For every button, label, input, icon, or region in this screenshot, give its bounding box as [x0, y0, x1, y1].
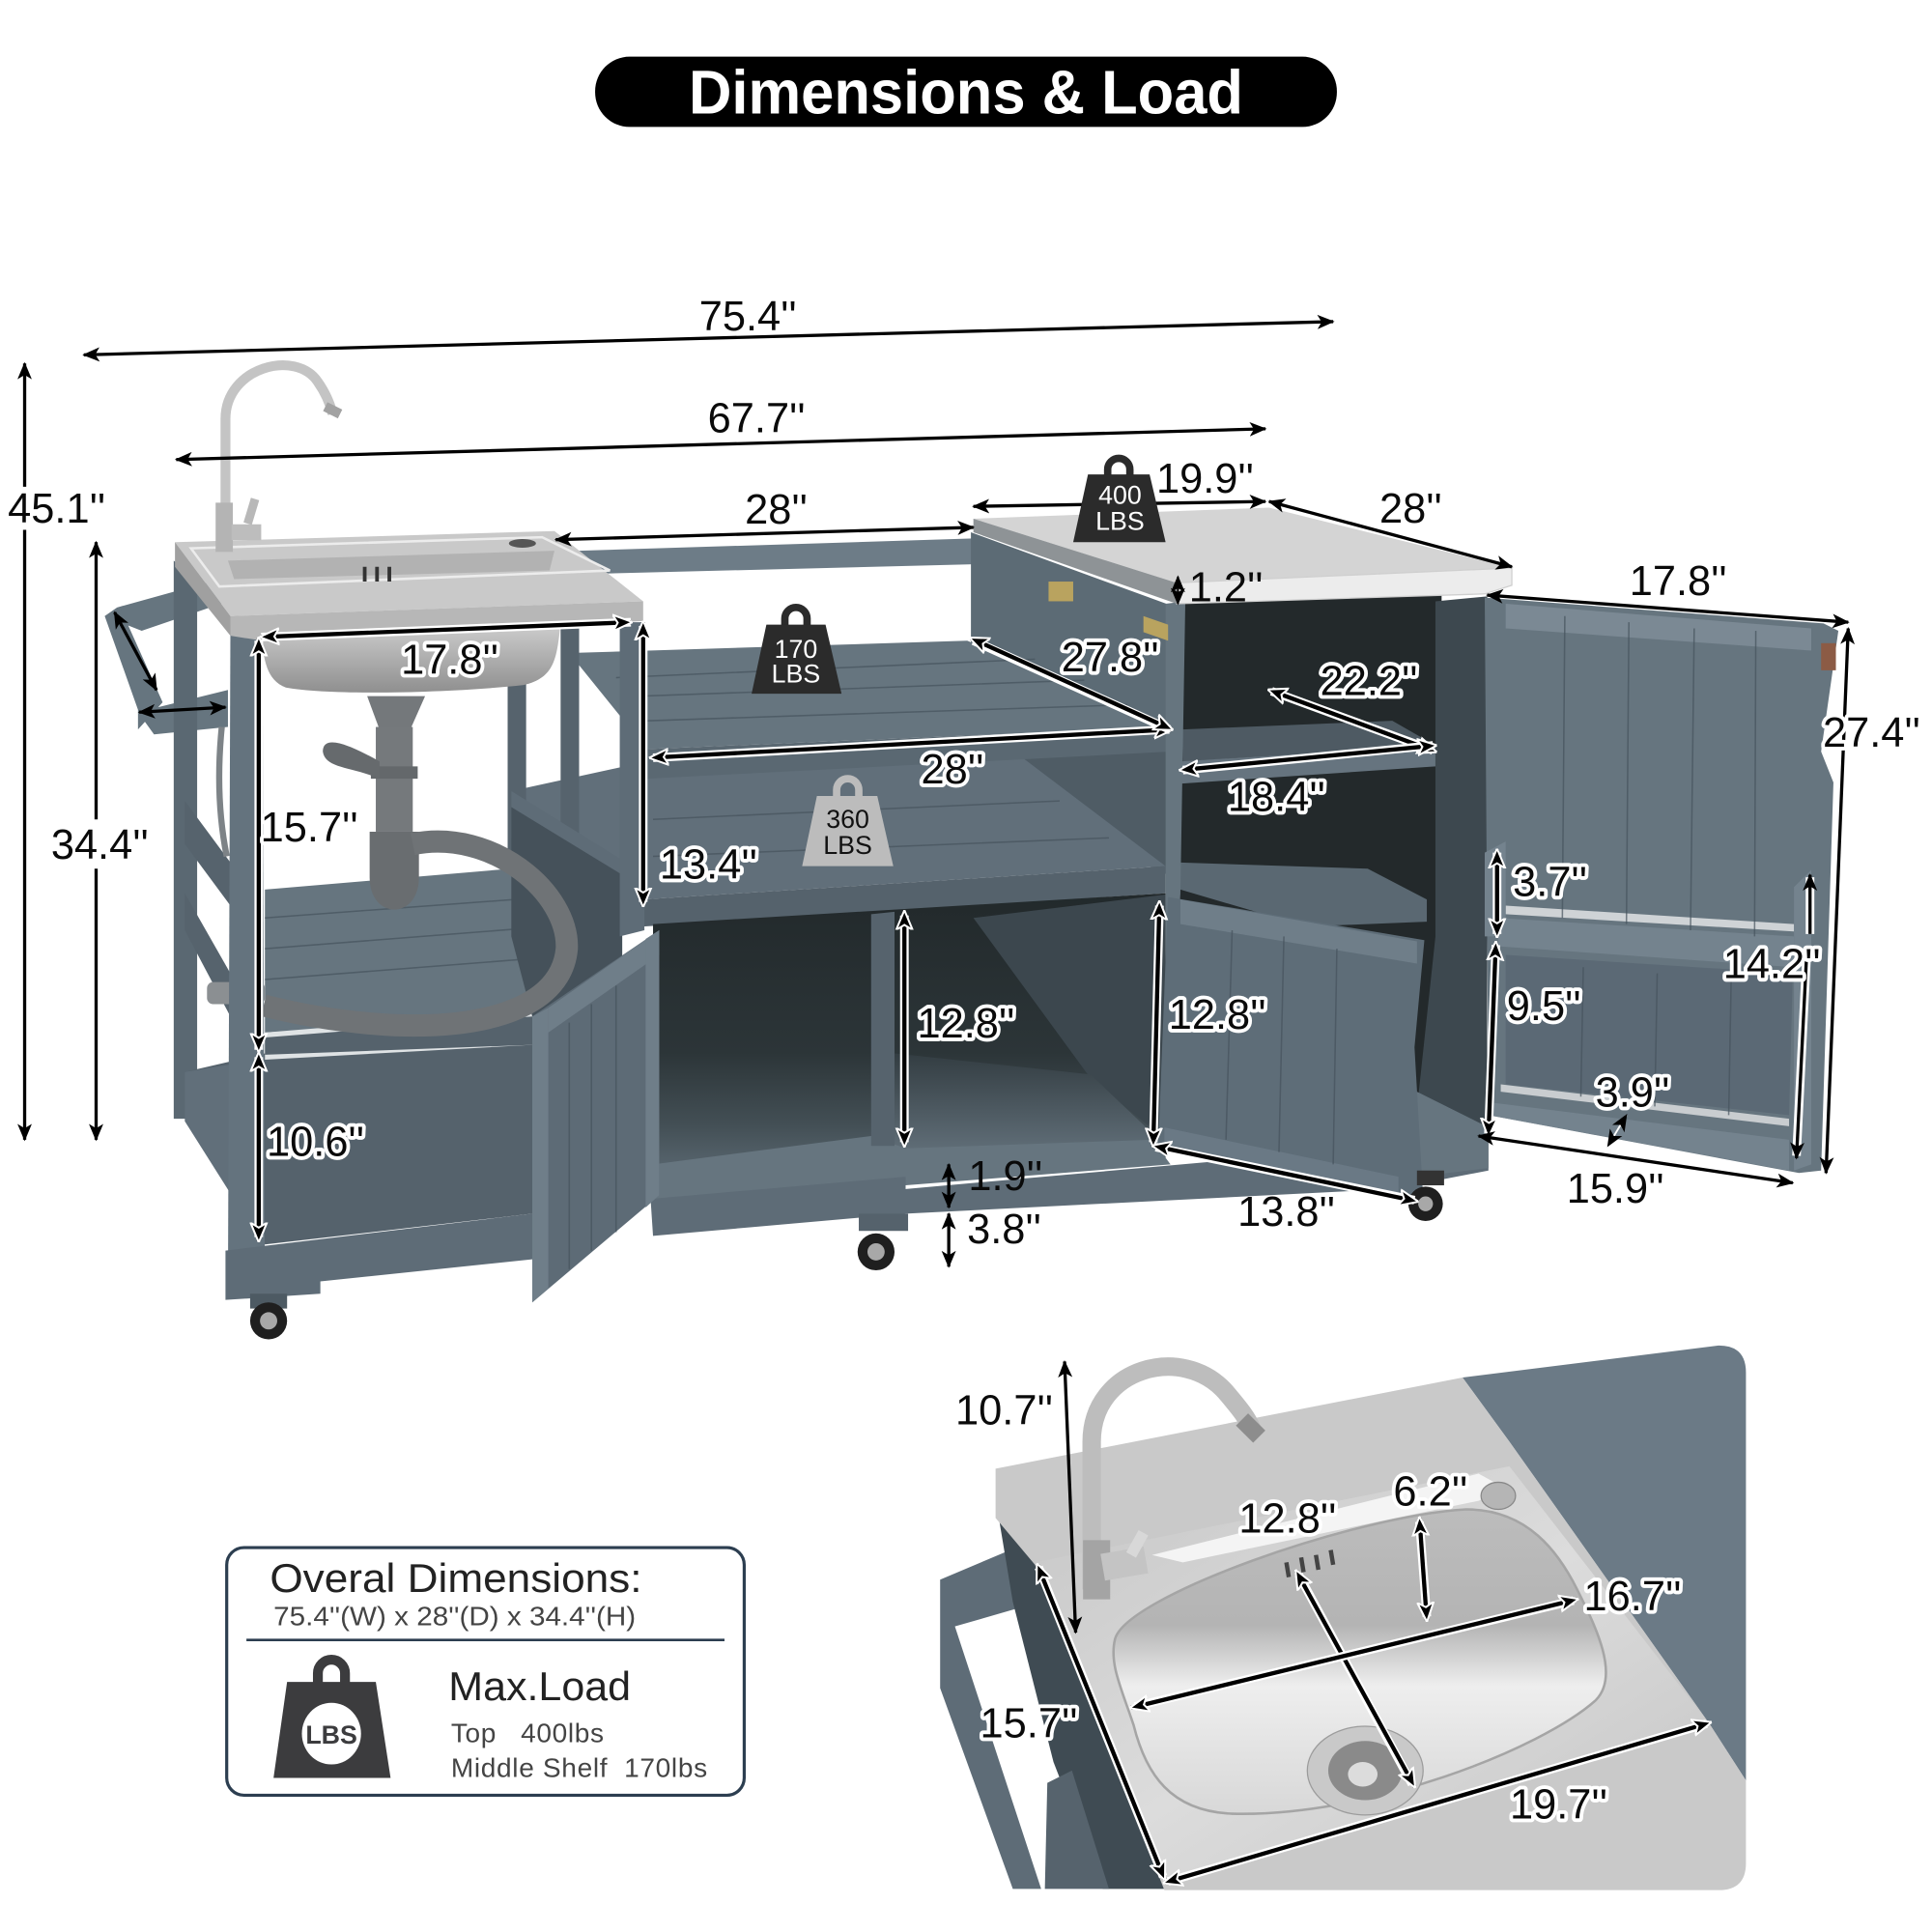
right cabinet: low step [1414, 1091, 1489, 1177]
dimension: 9.5: 9.5'' [1507, 983, 1581, 1030]
left unit: steel sink top [175, 531, 643, 640]
middle section: back rail [579, 538, 974, 574]
icon: LBS weight [273, 1660, 390, 1778]
heading: overall dimensions: Overal Dimensions: [270, 1555, 642, 1601]
icon: LBS weight: LBS [305, 1720, 357, 1749]
dimension: 27.4 door height [1823, 629, 1920, 1173]
dimension: 1.9: 1.9'' [968, 1153, 1042, 1200]
left towel bar [940, 1547, 1041, 1889]
left unit: towel bar [104, 577, 228, 734]
right cabinet: lower inner shelf [1180, 863, 1427, 926]
left unit: front left post [228, 622, 265, 1288]
dimension: 17.8 door top: 17.8'' [1630, 558, 1727, 605]
dimension: 28 top depth: 28'' [1379, 486, 1442, 532]
dimension: 75.4 width: 75.4'' [699, 294, 797, 340]
left unit: bottom beam [225, 1213, 532, 1300]
left unit: open door [532, 930, 659, 1302]
base beam [650, 1127, 1489, 1236]
dimension: 19.9 top width: 19.9'' [1156, 456, 1254, 502]
weight badge: 400 LBS: LBS [1095, 506, 1145, 535]
dimension: 10.6 post: 10.6'' [267, 1119, 364, 1165]
load: middle shelf: Middle Shelf 170lbs [451, 1752, 707, 1782]
left unit: sink bowl [261, 622, 560, 693]
dimension: 28 shelf width: 28'' [922, 747, 983, 793]
left unit: slatted shelf [265, 868, 616, 1060]
right cabinet: front post [1166, 601, 1185, 1146]
right cabinet: side wall [1417, 596, 1488, 1146]
left unit: back inner posts [508, 629, 579, 863]
faucet [1092, 1367, 1260, 1600]
dimension: 12.8 door [1153, 902, 1266, 1146]
middle section: back panel between shelves [985, 733, 1168, 875]
weight badge: 170 LBS: 170 [775, 635, 817, 664]
left unit: side rails [185, 801, 231, 1016]
middle section: lower shelf [511, 757, 1166, 926]
dimension: 15.7 post: 15.7'' [261, 805, 358, 851]
right cabinet: inner wall behind shelf [971, 532, 1173, 739]
dimension: 75.4 width [84, 294, 1333, 355]
left unit: back post [174, 560, 197, 1119]
dimension: 22.2 inner depth: 22.2'' [1321, 658, 1418, 704]
dimension: 27.8 shelf depth [971, 635, 1172, 729]
dimension: 14.2 [1723, 875, 1821, 1158]
dimension: 13.8 [1153, 1146, 1417, 1236]
dimension: 17.8 sink: 17.8'' [401, 638, 498, 684]
dimension: 34.4 height: 34.4'' [51, 822, 149, 868]
dimension: 10.7 [955, 1361, 1076, 1633]
weight badge: 170 LBS [752, 608, 841, 694]
right cabinet: dark interior [1177, 594, 1441, 1109]
left unit: drain hose [264, 841, 567, 1026]
dimension: 6.2: 6.2'' [1393, 1469, 1467, 1516]
middle section: right inner wall [974, 895, 1166, 1140]
overflow slots [1287, 1550, 1333, 1577]
drain cap [1481, 1482, 1516, 1509]
dimension: 1.2 thickness: 1.2'' [1189, 564, 1264, 611]
wood side table [1463, 1346, 1746, 1780]
drain strainer [1307, 1726, 1423, 1815]
middle section: divider post [871, 912, 895, 1146]
weight badge: 170 LBS: LBS [772, 660, 820, 689]
sink bowl [1114, 1509, 1606, 1814]
weight badge: 400 LBS [1073, 458, 1166, 542]
left unit: water line [219, 727, 227, 856]
left unit: bottom shelf cavity [185, 1035, 532, 1244]
left leg [998, 1513, 1164, 1889]
dimension: 18.4 inner width [1180, 746, 1435, 820]
dimension: 15.9 [1479, 1136, 1793, 1212]
dimension: 3.9 [1596, 1069, 1669, 1146]
dimension: 13.8: 13.8'' [1237, 1189, 1335, 1236]
right cabinet: upper inner shelf [1180, 721, 1435, 783]
dimension: 67.7 width: 67.7'' [708, 396, 806, 442]
steel counter [996, 1378, 1746, 1890]
middle section: upper shelf [569, 640, 1171, 779]
dimension: 15.7 side [980, 1565, 1164, 1879]
dimension: 3.7 [1497, 850, 1587, 936]
plate highlight [1152, 1474, 1506, 1562]
casters [250, 1171, 1444, 1339]
dimension: 19.9 top width [974, 456, 1265, 506]
dimension: 9.5 [1489, 943, 1581, 1136]
left unit: front right post [620, 622, 644, 936]
dimension: 14.2: 14.2'' [1723, 942, 1821, 988]
dimension: 19.7: 19.7'' [1510, 1782, 1607, 1829]
dimension: 13.4: 13.4'' [660, 841, 757, 888]
load: top: Top 400lbs [451, 1719, 604, 1748]
open centre door [1158, 897, 1424, 1198]
panel: summary box [227, 1548, 744, 1795]
dimension: towel bar [115, 612, 225, 712]
panel: sink close-up [940, 1346, 1746, 1890]
dimension: 17.8 door top [1488, 558, 1848, 622]
dimension: 6.2 [1393, 1469, 1467, 1620]
middle section: floor front edge [653, 1136, 1171, 1202]
dimension: 3.8: 3.8'' [967, 1207, 1041, 1253]
heading: max load: Max.Load [448, 1663, 631, 1709]
dimension: 15.9: 15.9'' [1567, 1166, 1664, 1212]
dimension: 67.7 width [176, 396, 1265, 460]
dimension: 18.4 inner width: 18.4'' [1228, 774, 1325, 820]
dimension: 27.4 door height: 27.4'' [1823, 710, 1920, 756]
left unit: pipe stub [207, 982, 265, 1005]
dimension: 16.7 [1131, 1574, 1682, 1708]
left unit: side wall under brace [511, 807, 622, 1016]
dimension: 3.9: 3.9'' [1596, 1069, 1669, 1116]
left unit: bottom shelf boards [185, 1060, 259, 1238]
dimension: 15.7 side: 15.7'' [980, 1700, 1078, 1747]
dimension: 1.9 [949, 1153, 1042, 1208]
middle section: lower dark interior [653, 894, 1166, 1182]
dimension: 27.8 shelf depth: 27.8'' [1062, 635, 1159, 681]
dimension: 16.7: 16.7'' [1584, 1574, 1682, 1620]
dimension: 28 top depth [1269, 486, 1512, 567]
dimension: 22.2 inner depth [1269, 658, 1435, 752]
weight badge: 360 LBS: 360 [826, 805, 869, 834]
dimension: 12.8 basin [1238, 1496, 1414, 1786]
lower rail [1045, 1771, 1109, 1889]
dimension: 12.8 centre: 12.8'' [918, 1001, 1014, 1047]
dimension: 19.7 [1164, 1722, 1710, 1883]
dimension: 12.8 door: 12.8'' [1169, 992, 1266, 1038]
dimension: 17.8 sink [261, 622, 631, 684]
dimension: 45.1 height: 45.1'' [8, 486, 105, 532]
right cabinet: steel top [974, 508, 1512, 604]
left unit: faucet [224, 365, 340, 552]
title: Dimensions & Load [689, 57, 1243, 127]
dimension: 3.7: 3.7'' [1513, 859, 1587, 905]
middle section: right bay floor [895, 1054, 1166, 1155]
weight badge: 360 LBS [802, 779, 894, 867]
dimension: 3.8 [949, 1207, 1041, 1266]
weight badge: 400 LBS: 400 [1098, 481, 1142, 510]
dimension: 28 middle depth: 28'' [745, 487, 808, 533]
sink plate [1035, 1466, 1710, 1886]
product: outdoor kitchen cart [104, 365, 1838, 1339]
hinges [1048, 582, 1168, 640]
left unit: cross brace [511, 791, 622, 912]
dimension: 10.7: 10.7'' [955, 1387, 1053, 1434]
right open door [1485, 598, 1838, 1173]
dimension: 28 middle depth [555, 487, 974, 540]
dimension: 12.8 basin: 12.8'' [1238, 1496, 1336, 1543]
overall dimensions values: 75.4''(W) x 28''(D) x 34.4''(H) [273, 1601, 636, 1631]
dimension: 28 shelf width [650, 729, 1172, 793]
left unit: drain pipe [323, 696, 425, 910]
weight badge: 360 LBS: LBS [823, 831, 872, 860]
